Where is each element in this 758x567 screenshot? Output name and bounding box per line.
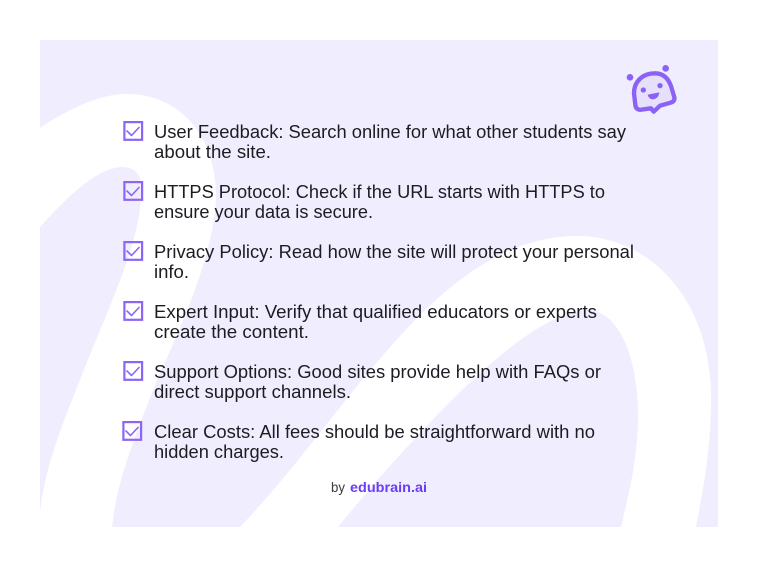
item text: ensure your data is secure. [154,202,373,222]
item text: HTTPS Protocol: Check if the URL starts with HTTPS to [154,182,605,202]
item text: about the site. [154,142,271,162]
item text: Expert Input: Verify that qualified educators or experts [154,302,597,322]
panel: lavender background with white swooshes [40,40,718,527]
item text [154,422,595,462]
checkbox icon [124,362,142,380]
item text: direct support channels. [154,382,351,402]
item text [154,362,601,402]
checklist item: user feedback [124,122,626,162]
item text: create the content. [154,322,309,342]
item text [154,302,597,342]
item text: info. [154,262,189,282]
footer credit: by edubrain.ai: by [331,479,345,495]
item text: User Feedback: Search online for what other students say [154,122,626,142]
checkbox icon [124,182,142,200]
icon: edubrain robot chat logo [627,65,674,112]
checkbox icon [124,242,142,260]
checklist item: https protocol [124,182,605,222]
checklist item: support options [124,362,601,402]
checklist item: clear costs [123,422,595,462]
item text: hidden charges. [154,442,284,462]
footer credit: by edubrain.ai: edubrain.ai [350,479,427,495]
item text [154,182,605,222]
checklist item: privacy policy [124,242,634,282]
checkbox icon [123,422,141,440]
item text: Clear Costs: All fees should be straightforward with no [154,422,595,442]
item text [154,242,634,282]
item text [154,122,626,162]
checkbox icon [124,302,142,320]
checklist item: expert input [124,302,597,342]
item text: Privacy Policy: Read how the site will protect your personal [154,242,634,262]
checkbox icon [124,122,142,140]
item text: Support Options: Good sites provide help with FAQs or [154,362,601,382]
